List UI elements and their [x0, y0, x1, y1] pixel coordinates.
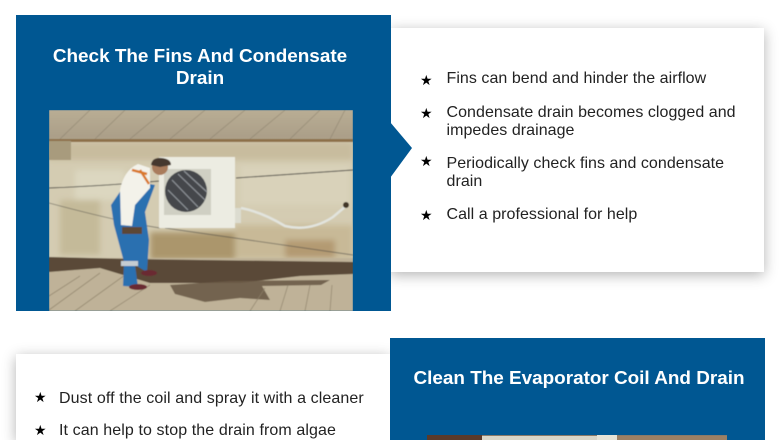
photo: evaporator coil top edge	[427, 435, 727, 440]
icon: star bullet 4: ★	[420, 208, 433, 224]
icon: star bullet 1: ★	[34, 390, 47, 406]
panel: fins and condensate drain heading	[16, 15, 391, 311]
photo: technician inspecting outdoor AC unit	[49, 110, 353, 311]
icon: star bullet 2: ★	[420, 106, 433, 122]
list: evaporator coil tips	[34, 390, 364, 439]
text: periodic check	[446, 155, 724, 190]
text: stop algae: It can help to stop the drain from algae	[59, 422, 336, 439]
worker	[111, 180, 155, 287]
text: airflow: Fins can bend and hinder the airflow	[446, 70, 706, 87]
arrow: pointer from heading panel to details	[391, 123, 412, 176]
AC unit	[159, 157, 235, 228]
panel: evaporator coil heading	[390, 338, 765, 440]
heading: check the fins and condensate drain: Check The Fins And Condensate	[53, 46, 347, 67]
panel: evaporator coil details	[16, 354, 390, 440]
text: dust off: Dust off the coil and spray it with a cleaner	[59, 390, 364, 407]
text: condensate drain clogged: Condensate drain becomes clogged and	[446, 104, 736, 121]
text: periodic check: drain	[446, 173, 482, 190]
text: condensate drain clogged	[446, 104, 736, 139]
icon: star bullet 3: ★	[420, 154, 433, 170]
text: call a professional: Call a professional for help	[446, 206, 637, 223]
panel: fins and condensate drain details	[390, 28, 764, 272]
heading: check the fins and condensate drain: Drain	[176, 68, 224, 89]
roof floor	[49, 258, 353, 311]
text: periodic check: Periodically check fins and condensate	[446, 155, 724, 172]
icon: star bullet 2: ★	[34, 423, 47, 439]
text: condensate drain clogged: impedes drainage	[446, 122, 574, 139]
heading: clean the evaporator coil and drain: Clean The Evaporator Coil And Drain	[414, 368, 744, 389]
list: fins and condensate drain tips	[420, 70, 736, 224]
icon: star bullet 1: ★	[420, 73, 433, 89]
heading: check the fins and condensate drain	[53, 46, 347, 89]
